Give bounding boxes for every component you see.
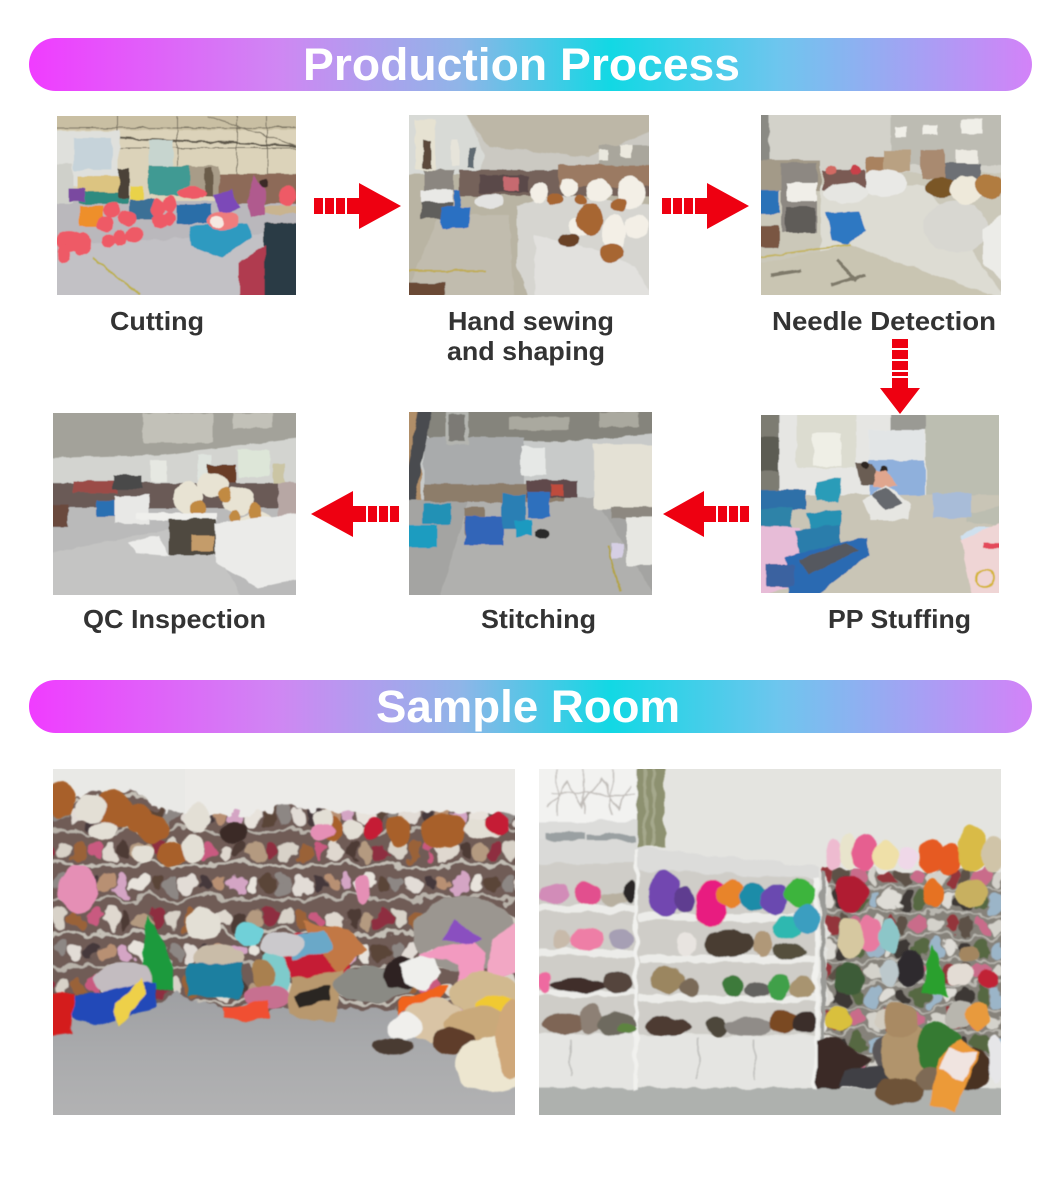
arrow: hand sewing to needle detection <box>662 183 749 229</box>
caption: Needle Detection: Needle Detection <box>772 306 996 336</box>
banner: Sample Room <box>29 680 1032 733</box>
photo: stitching workshop <box>409 412 652 595</box>
banner: Production Process: Production Process <box>303 39 740 90</box>
photo: sample room toy wall corner <box>53 769 515 1115</box>
arrow: needle detection to PP stuffing <box>880 339 920 414</box>
photo: sample room cabinets and shelves <box>539 769 1001 1115</box>
photo: needle detection hall <box>761 115 1001 295</box>
photo: cutting workshop <box>57 116 296 295</box>
caption: Hand sewing and shaping <box>447 306 614 366</box>
caption: QC Inspection: QC Inspection <box>83 604 266 634</box>
photo: QC inspection hall <box>53 413 296 595</box>
caption: PP Stuffing: PP Stuffing <box>828 604 971 634</box>
caption: Cutting: Cutting <box>110 306 204 336</box>
caption: Stitching: Stitching <box>481 604 596 634</box>
photo: hand sewing hall <box>409 115 649 295</box>
arrow: cutting to hand sewing <box>314 183 401 229</box>
caption: Hand sewing and shaping: and shaping <box>447 336 605 366</box>
caption: Hand sewing and shaping: Hand sewing <box>448 306 614 336</box>
photo: PP stuffing room <box>761 415 999 593</box>
banner: Production Process <box>29 38 1032 91</box>
arrow: PP stuffing to stitching <box>663 491 749 537</box>
arrow: stitching to QC inspection <box>311 491 399 537</box>
banner: Sample Room: Sample Room <box>376 681 680 732</box>
